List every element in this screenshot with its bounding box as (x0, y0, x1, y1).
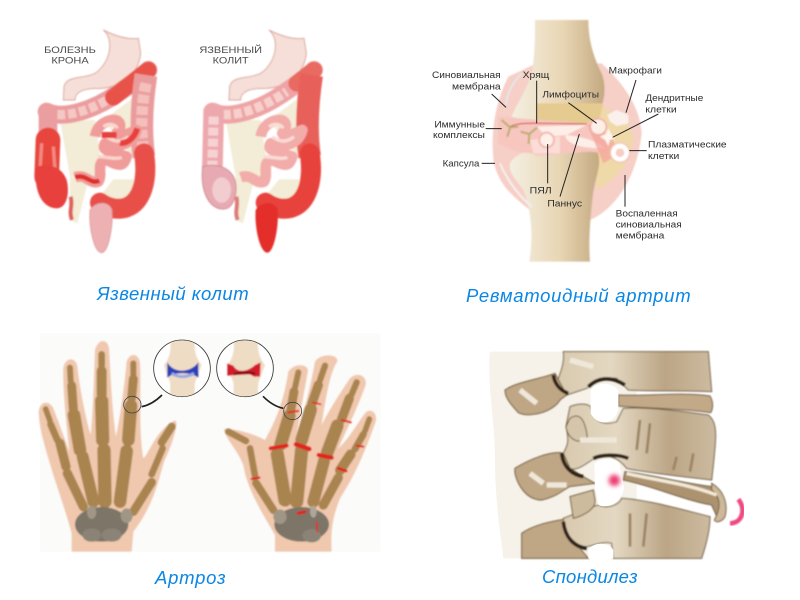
label: dendritic cells: Дендритные (645, 93, 703, 103)
highlight ring: healthy joint (124, 396, 141, 413)
panel background (40, 333, 381, 552)
label: immune complexes: Иммунные (434, 119, 485, 129)
panel: spondylosis spine (489, 352, 742, 558)
label: pannus: Паннус (547, 199, 583, 209)
caption: spondylosis: Спондилез (542, 566, 638, 587)
inflammation arc: osteophyte (730, 499, 742, 523)
label: inflamed synovial membrane: Воспаленная (616, 208, 678, 218)
panel: rheumatoid arthritis joint: клетки (645, 105, 677, 115)
arrow: to healthy joint close-up (142, 395, 162, 407)
inflammation spot: foramen (609, 475, 620, 486)
close-up: damaged joint (217, 338, 273, 398)
label: Crohn's disease: БОЛЕЗНЬ (44, 45, 96, 55)
arrow: to damaged joint close-up (263, 396, 283, 408)
vertebrae illustration (505, 352, 726, 558)
panel: rheumatoid arthritis joint (432, 20, 727, 262)
panel: colon diseases (36, 30, 314, 253)
colon illustration: Crohn's disease (36, 30, 148, 253)
left healthy hand (39, 341, 176, 552)
panel: hand osteoarthritis (39, 333, 381, 552)
label: macrophages: Макрофаги (609, 66, 662, 76)
caption: ulcerative colitis: Язвенный колит (96, 283, 249, 304)
label: lymphocytes: Лимфоциты (542, 89, 599, 99)
leader lines (482, 80, 658, 207)
panel: colon diseases: КРОНА (51, 56, 90, 66)
label: plasma cells: Плазматические (648, 139, 727, 149)
caption: rheumatoid arthritis: Ревматоидный артрит (466, 285, 691, 306)
panel: rheumatoid arthritis joint: комплексы (433, 130, 485, 140)
panel: rheumatoid arthritis joint: синовиальная (616, 219, 682, 229)
colon illustration: ulcerative colitis (202, 30, 314, 253)
label: cartilage: Хрящ (523, 70, 550, 80)
label: ulcerative colitis: ЯЗВЕННЫЙ (199, 44, 262, 55)
panel: rheumatoid arthritis joint: мембрана (452, 81, 501, 91)
joint illustration (493, 20, 642, 262)
spine background (489, 352, 637, 558)
close-up: healthy joint (154, 338, 210, 398)
panel: rheumatoid arthritis joint: клетки (648, 151, 679, 161)
right arthritic hand (224, 355, 376, 552)
panel: rheumatoid arthritis joint: мембрана (616, 230, 664, 240)
label: capsule: Капсула (443, 159, 479, 169)
label: synovial membrane: Синовиальная (432, 70, 501, 80)
highlight ring: damaged joint (284, 402, 302, 420)
caption: arthrosis: Артроз (154, 567, 226, 588)
panel: colon diseases: КОЛИТ (213, 56, 249, 66)
foramen openings (588, 384, 624, 558)
label: PMN: ПЯЛ (530, 185, 552, 195)
